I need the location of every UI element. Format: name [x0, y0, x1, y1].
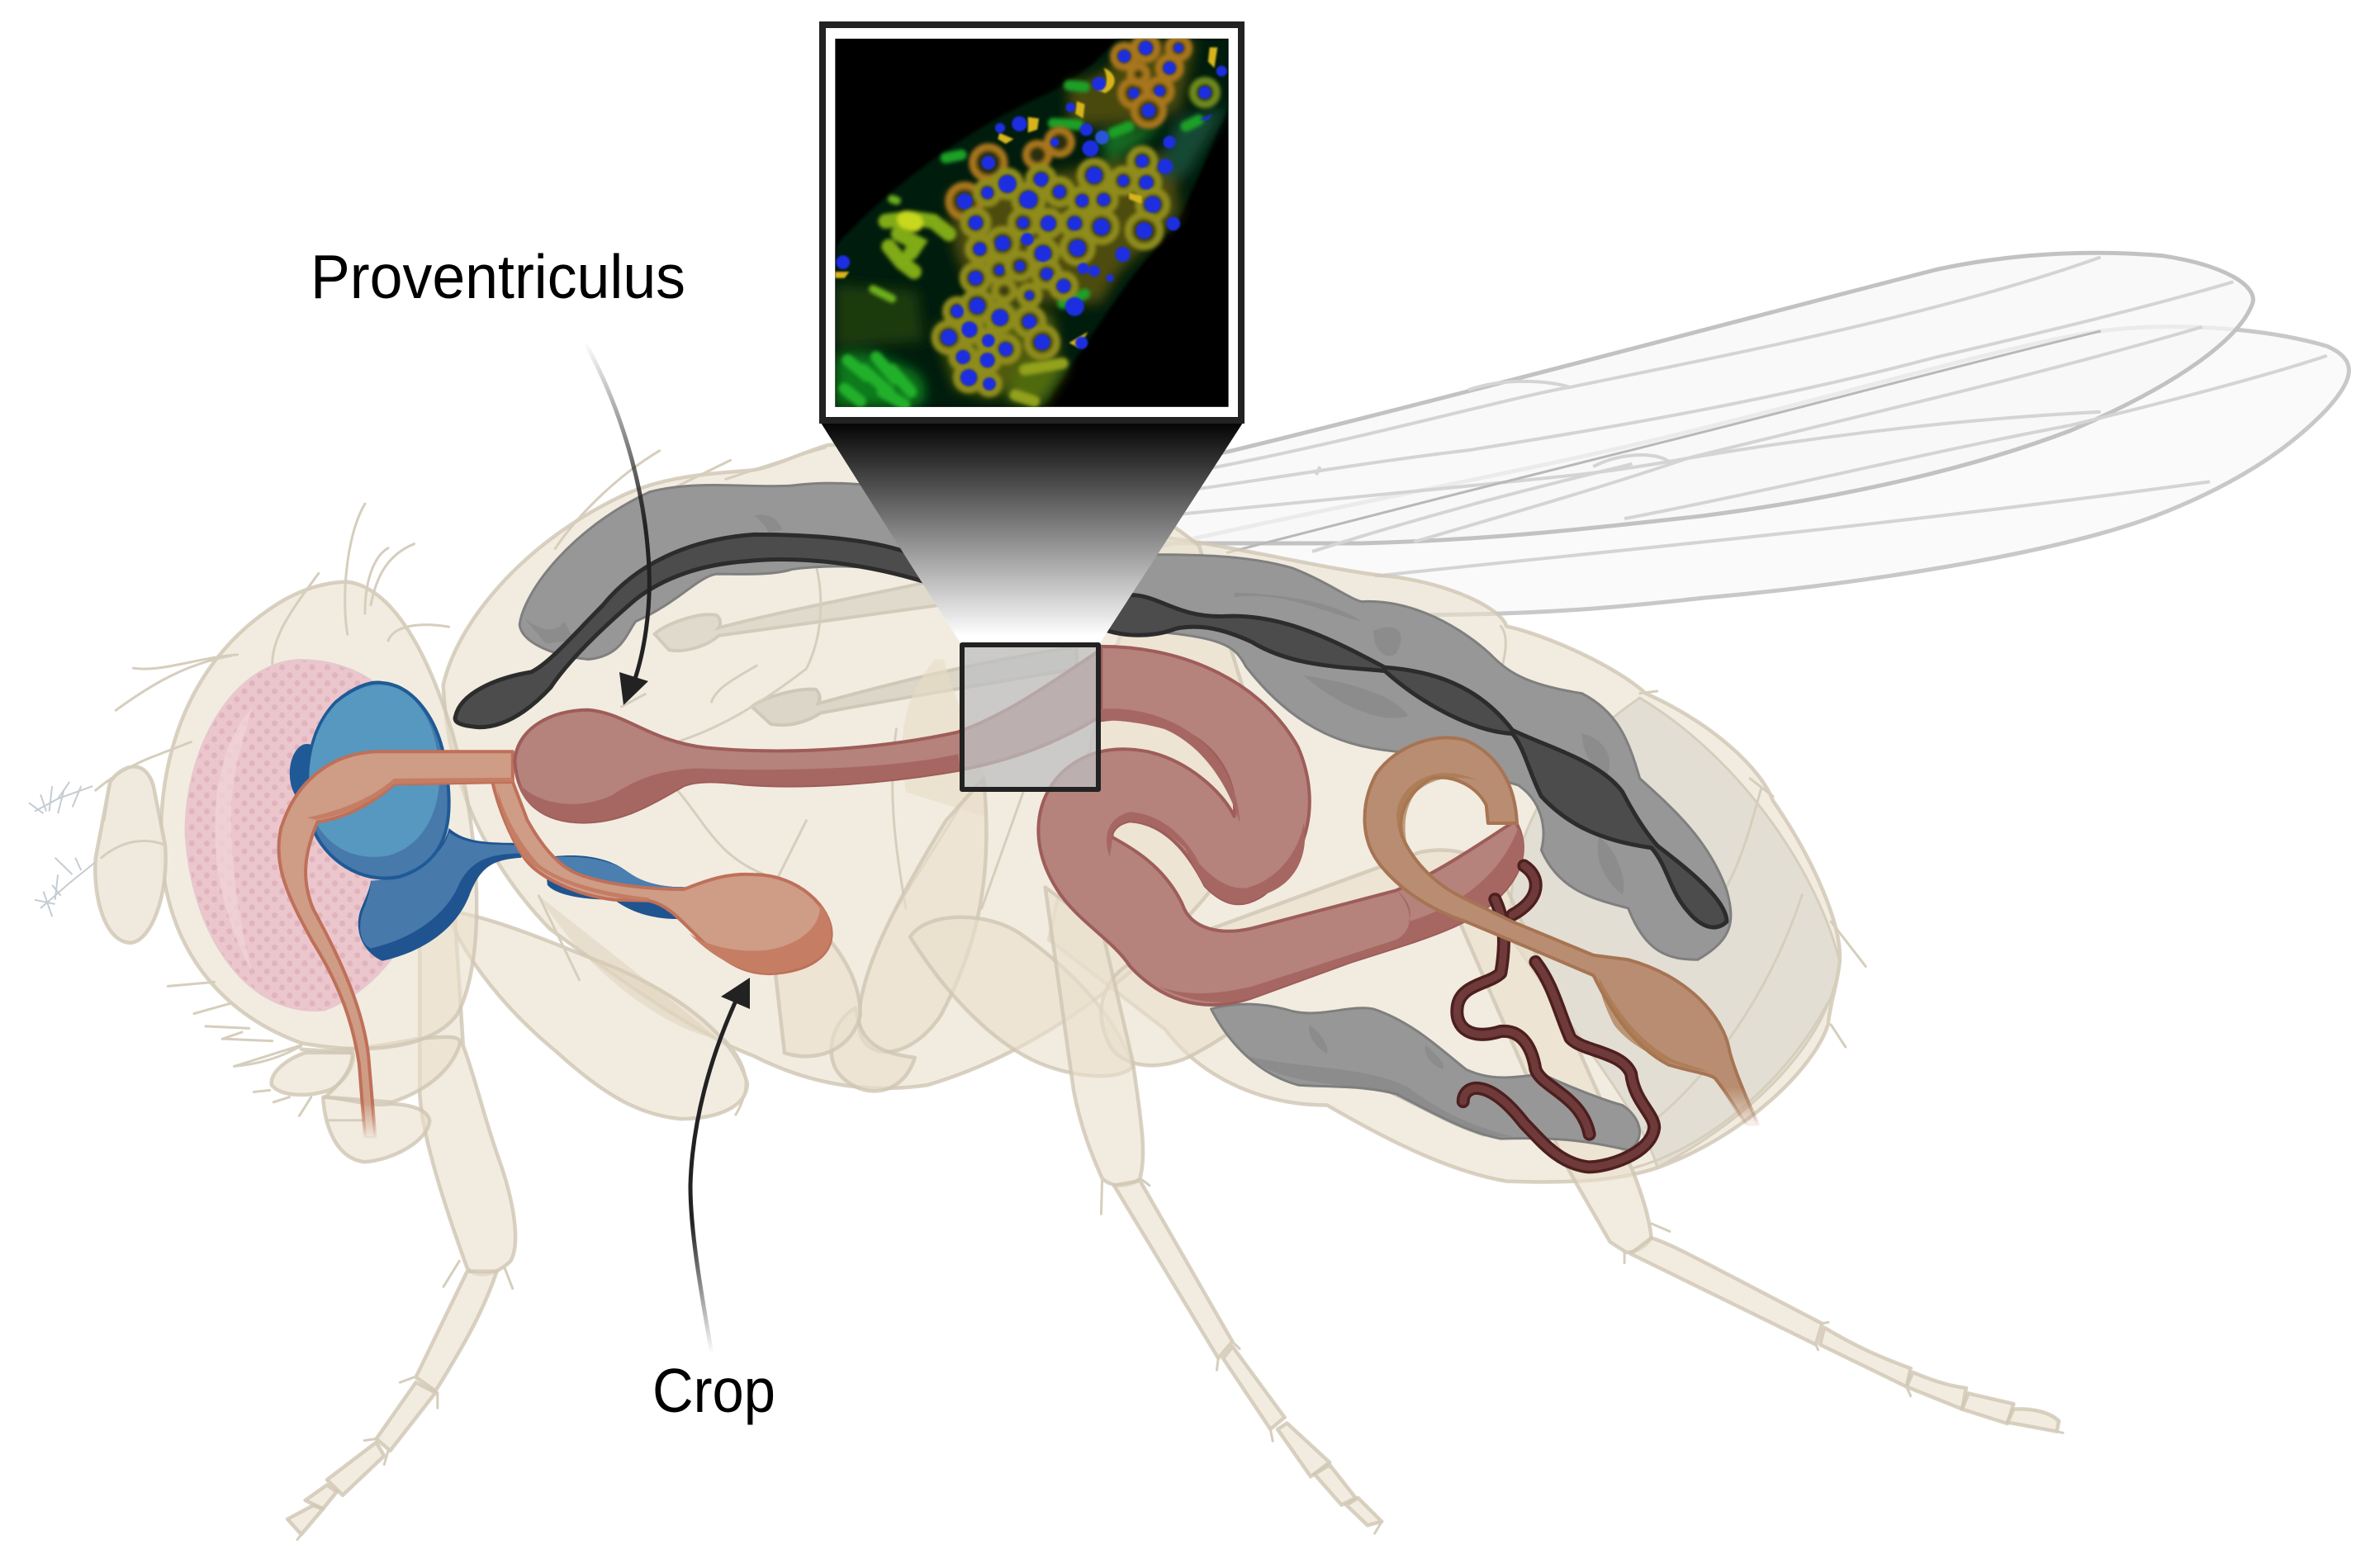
tissue	[835, 39, 1229, 407]
front gland	[519, 483, 934, 660]
nuclei	[836, 41, 1227, 391]
upper lobe	[307, 683, 449, 879]
confocal image	[835, 36, 1229, 407]
tarsus segments	[377, 1382, 435, 1451]
lower gland	[1211, 1004, 1639, 1150]
tibia	[1631, 1238, 1822, 1344]
tarsus segments	[1223, 1347, 1285, 1429]
oesophagus shading	[307, 778, 513, 820]
blurred glow patches	[835, 41, 1227, 407]
head bristles	[116, 504, 449, 1066]
oesophagus	[278, 751, 513, 1138]
arrow: proventriculus	[585, 342, 649, 705]
coxa ovals	[859, 779, 987, 1052]
femur	[1445, 889, 1651, 1253]
fly body	[29, 445, 2063, 1540]
head	[29, 504, 476, 1066]
haltere: upper	[655, 571, 982, 651]
head capsule	[161, 582, 476, 1049]
back lobe	[290, 744, 325, 803]
lower lobe highlight	[360, 832, 521, 948]
middle leg	[766, 779, 1382, 1533]
wing: upper	[1000, 253, 2253, 543]
thorax	[443, 445, 1274, 1088]
label: Crop: Crop	[652, 1356, 775, 1425]
tibia	[1114, 1181, 1232, 1358]
malpighian tubules	[1457, 865, 1654, 1167]
eye highlight	[215, 708, 252, 972]
tarsus segments	[1820, 1328, 1911, 1386]
abdomen	[1049, 537, 1866, 1182]
branch to crop	[492, 782, 832, 973]
foregut	[278, 751, 832, 1138]
compound eye	[185, 660, 441, 1011]
midgut: coil	[1038, 647, 1524, 1005]
arrow: crop	[690, 978, 750, 1354]
right lobe	[544, 855, 690, 919]
wings	[1000, 253, 2349, 620]
dark tube: front	[455, 534, 925, 727]
antenna arista	[29, 782, 96, 917]
proboscis lobes	[272, 1053, 353, 1095]
haltere: lower	[751, 647, 1077, 725]
thorax internals	[555, 448, 1077, 908]
abdomen rear shade	[1510, 698, 1840, 1168]
wing veins	[1078, 257, 2327, 576]
dark tube: rear	[1101, 595, 1727, 927]
hindgut shading	[1396, 773, 1709, 1072]
blue organ	[290, 683, 690, 961]
magnified region box	[962, 645, 1098, 789]
femur	[1045, 888, 1143, 1186]
zoom funnel	[821, 423, 1243, 643]
femur	[420, 861, 515, 1274]
proventriculus shading	[518, 754, 960, 822]
rear gland	[1112, 555, 1731, 959]
upper lobe highlight	[309, 685, 439, 857]
bright tissue streaks	[845, 85, 1198, 405]
leg base shade	[903, 660, 987, 817]
midgut: anterior with proventriculus	[514, 647, 1115, 822]
wing: lower	[1000, 327, 2349, 620]
label: Proventriculus: Proventriculus	[311, 242, 685, 311]
lower lobe	[358, 828, 521, 961]
micrograph inset	[823, 25, 1241, 420]
foreleg coxa lobe	[446, 896, 747, 1119]
yellow highlights	[835, 47, 1217, 348]
hind leg	[1445, 889, 2063, 1433]
coil shading	[1101, 708, 1524, 1002]
crop shading	[498, 790, 832, 973]
cell rings	[935, 36, 1217, 393]
foreleg	[222, 861, 515, 1540]
maxilla	[301, 1037, 460, 1102]
inset frame	[823, 25, 1241, 420]
antenna	[95, 766, 166, 943]
right lobe highlight	[544, 857, 678, 893]
tibia	[415, 1272, 497, 1391]
hind femur beam	[1188, 850, 1477, 953]
hindgut and rectum	[1364, 737, 1758, 1125]
grey fat body: dorsal	[519, 483, 1731, 1150]
